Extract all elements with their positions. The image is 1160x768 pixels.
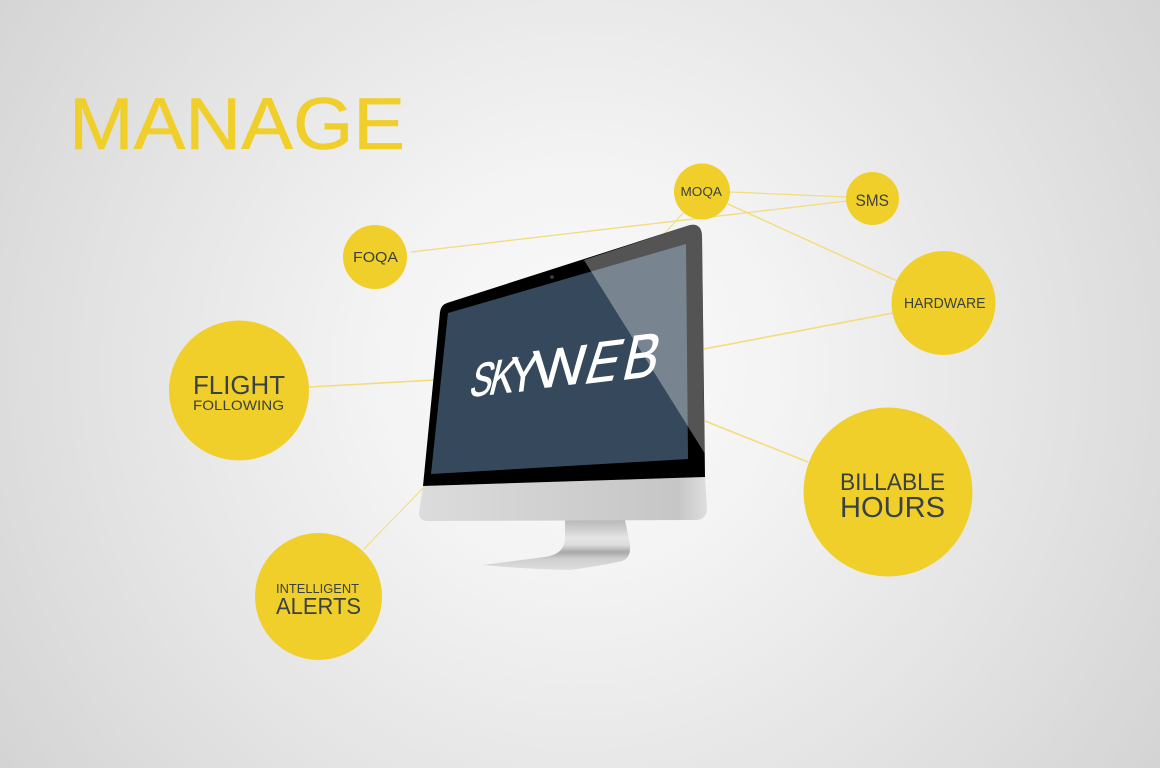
bubble: MOQA: MOQA [680, 184, 722, 199]
monitor illustration [419, 225, 707, 570]
bubble: flight following: FOLLOWING [193, 397, 284, 413]
bubble: SMS: SMS [856, 191, 889, 210]
bubble: flight following: FLIGHT [193, 370, 285, 400]
screen label: W [533, 333, 587, 401]
bubble: MOQA [674, 164, 730, 220]
monitor chin [419, 477, 707, 521]
monitor bezel [423, 225, 705, 486]
bubble: billable hours: BILLABLE [840, 469, 945, 496]
screen label: K [484, 346, 523, 406]
connector lines [309, 192, 897, 549]
bubble: billable hours [804, 408, 972, 576]
bubble: intelligent alerts [255, 533, 382, 660]
title: MANAGE [69, 84, 405, 165]
bubble: FOQA: FOQA [353, 249, 398, 266]
bubble: hardware [892, 251, 996, 355]
camera [550, 275, 554, 279]
screen label: Y [506, 344, 541, 405]
bubble: billable hours: HOURS [840, 492, 945, 524]
screen label: B [617, 318, 668, 394]
bubble: intelligent alerts: INTELLIGENT [276, 581, 359, 596]
bubble: flight following [169, 320, 309, 460]
bubble: hardware: HARDWARE [904, 296, 986, 312]
screen label [465, 318, 668, 407]
monitor stand [482, 520, 630, 570]
screen glare [584, 225, 704, 453]
screen label: S [465, 351, 501, 407]
bubble: intelligent alerts: ALERTS [276, 593, 361, 619]
bubble: SMS [846, 172, 899, 225]
screen label: E [578, 326, 632, 397]
bubble: FOQA [343, 225, 407, 289]
monitor screen [431, 244, 688, 474]
